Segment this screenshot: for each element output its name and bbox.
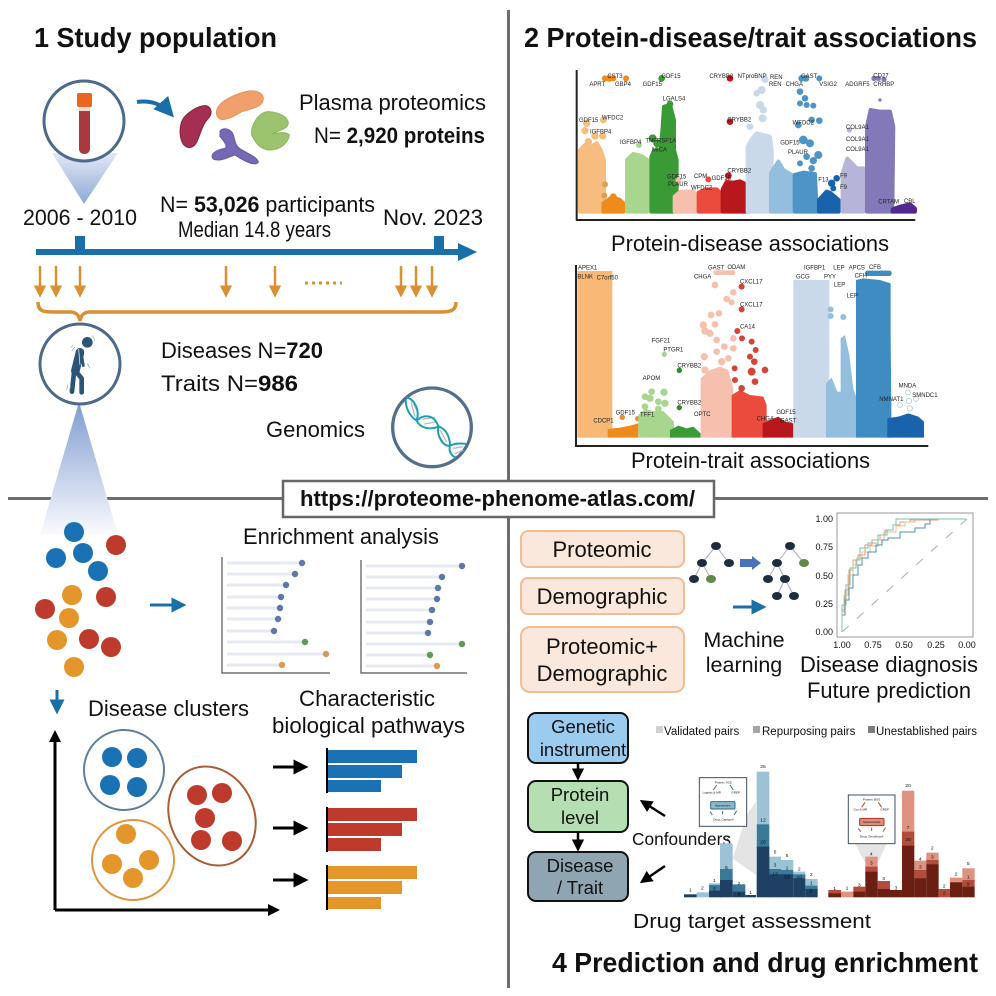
caption: protein-trait: Protein-trait associations [631, 448, 870, 473]
bar values: blue: 5 [713, 886, 716, 892]
bar chart: red pathways [326, 807, 417, 852]
heading: prediction and drug enrichment: 4 Prediction and drug enrichment [552, 947, 978, 978]
inset: ACE triangle: Drug: Captopril [713, 817, 734, 821]
bar values: blue: 2 [701, 886, 704, 892]
gene labels: disease plot: CRHBP [873, 82, 894, 88]
gene labels: disease plot: GDF15 [780, 140, 800, 146]
text: machine learning: learning [706, 653, 782, 677]
legend: pairs: Repurposing pairs [762, 726, 856, 738]
bar chart: orange pathways [326, 865, 417, 910]
cluster axes [55, 737, 272, 910]
chart: protein-disease Manhattan plot [577, 70, 916, 220]
gene labels: trait plot: LEP [833, 266, 845, 272]
bar values: blue: 2 [810, 872, 813, 878]
bar values: blue: 6 [810, 888, 813, 894]
bar values: blue: 2 [798, 867, 801, 873]
panel: study population [23, 22, 486, 535]
chart: ROC curves: 0.25 [815, 599, 833, 609]
box: demographic [521, 578, 684, 614]
gene labels: disease plot: GDF15 [579, 118, 599, 124]
arrow: instrument to protein [577, 763, 579, 777]
arrow: protein to disease [577, 832, 579, 848]
gene labels: disease plot: WFDC2 [793, 121, 815, 127]
gene labels: disease plot: CRYBB2 [709, 74, 734, 80]
box: protein level: level [561, 807, 599, 828]
gene labels: trait plot: CFB [869, 265, 881, 271]
bar values: red: 7 [907, 825, 910, 831]
bar values: blue: 26 [760, 839, 766, 845]
box: disease / trait: / Trait [557, 877, 603, 898]
gene labels: disease plot: NTproBNP [738, 74, 767, 80]
box: genetic instrument: Genetic [551, 716, 615, 737]
bar values: blue: 10 [797, 874, 802, 880]
bar chart: blue pathways [326, 748, 417, 793]
text: machine learning: Machine [703, 628, 785, 652]
gene labels: trait plot: BLNK [577, 275, 593, 281]
bar values: blue: 13 [784, 874, 790, 880]
gene labels: disease plot: APRT [589, 82, 606, 88]
bar values: blue: 1 [810, 880, 813, 886]
arrow: to ML [733, 606, 762, 608]
gene labels: trait plot: APEX1 [578, 266, 598, 272]
icon: patient [40, 324, 120, 404]
gene labels: trait plot: GDF15 [776, 410, 796, 416]
URL banner: https://proteome-phenome-atlas.com/ [300, 486, 695, 511]
bar values: red: 2 [955, 872, 958, 878]
text: outcomes: Future prediction [807, 678, 971, 703]
gene labels: trait plot: TFF1 [640, 412, 655, 418]
box: genetic instrument [528, 713, 628, 763]
gene labels: disease plot: CHGA [786, 82, 803, 88]
icon: cone to clusters [40, 402, 118, 535]
gene labels: disease plot: MICA [652, 148, 667, 154]
box: proteomic+demographic: Proteomic+ [546, 634, 658, 659]
gene labels: trait plot: APCS [849, 266, 865, 272]
gene labels: disease plot: COL9A1 [846, 137, 870, 143]
gene labels: trait plot: NMNAT1 [879, 397, 904, 403]
gene labels: trait plot: OPTC [694, 412, 711, 418]
chart: ROC curves: 0.00 [958, 640, 976, 650]
gene labels: disease plot: F9 [840, 185, 848, 191]
bar values: blue: 4 [738, 892, 741, 898]
chart: lollipop right [361, 560, 467, 673]
bar values: red: 3 [919, 864, 922, 870]
gene labels: trait plot [577, 265, 938, 425]
inset: ACE triangle: Protein: ACE [715, 780, 732, 784]
text: diseases: Diseases N=720 [161, 338, 323, 363]
box: proteomic [521, 531, 684, 567]
box: disease / trait: Disease [547, 855, 613, 876]
text: plasma proteomics: Plasma proteomics [299, 90, 486, 115]
box: demographic: Demographic [537, 584, 667, 609]
gene labels: trait plot: GAST [708, 266, 725, 272]
gene labels: trait plot: ODAM [727, 265, 745, 271]
timeline arrow [36, 236, 477, 261]
text: end date: Nov. 2023 [383, 205, 483, 230]
gene labels: disease plot: F13 [818, 177, 829, 183]
gene labels: trait plot: CXCL17 [740, 302, 763, 308]
bar values: red: 4 [870, 852, 873, 858]
bar values: blue: 12 [724, 836, 729, 842]
gene labels: disease plot: IGFBP4 [620, 140, 642, 146]
inset: ACE triangle [699, 778, 747, 826]
bar values: red: 4 [919, 856, 922, 862]
bar values: blue [689, 764, 813, 898]
orange cluster [92, 820, 174, 900]
bar values: red: 2 [943, 890, 946, 896]
gene labels: trait plot: IGFBP1 [804, 266, 826, 272]
bar values: red: 1 [967, 874, 970, 880]
icon: curved arrow [137, 101, 170, 113]
gene labels: disease plot: WFDC2 [602, 116, 624, 122]
gene labels: trait plot: CHGA [757, 416, 774, 422]
gene labels: disease plot: CST3 [607, 74, 623, 80]
gene labels: trait plot: CDCP1 [593, 419, 614, 425]
icon: proteins [180, 91, 289, 164]
gene labels: trait plot: CRYBB2 [677, 400, 702, 406]
chart: ROC curves: 0.75 [815, 542, 833, 552]
heading: pathways: Characteristic [299, 686, 435, 711]
gene labels: trait plot: APOM [643, 376, 660, 382]
box: protein level [528, 781, 628, 832]
bar values: red: 3 [931, 855, 934, 861]
gene labels: disease plot: CRYBB2 [727, 117, 752, 123]
arrow: confounder to disease [643, 866, 665, 881]
gene labels: trait plot: GAST [780, 419, 797, 425]
box: proteomic+demographic: Demographic [537, 661, 667, 686]
gene labels: disease plot: LGALS4 [663, 97, 686, 103]
chart: ROC curves [815, 513, 976, 650]
heading: disease clusters: Disease clusters [88, 696, 249, 721]
gene labels: disease plot: PLAUR [668, 182, 689, 188]
text: start years: 2006 - 2010 [23, 205, 137, 230]
gene labels: disease plot: GDF15 [661, 74, 681, 80]
gene labels: disease plot: REN [770, 75, 783, 81]
bar values: red: 9 [967, 882, 970, 888]
gene labels: trait plot: LEP [847, 294, 858, 300]
bar values: red: 2 [943, 884, 946, 890]
heading: pathways [272, 686, 465, 738]
box: proteomic+demographic [521, 627, 684, 692]
bar values: blue: 5 [774, 850, 777, 856]
chart: drug target blue bars [684, 764, 818, 898]
chart: ROC curves: 0.00 [815, 627, 833, 637]
orange follow-up arrows [40, 266, 432, 294]
bar values: blue: 12 [760, 817, 766, 823]
bar values: blue: 13 [772, 872, 778, 878]
gene labels: trait plot: CXCL17 [740, 279, 763, 285]
legend: pairs [656, 726, 977, 738]
bar values: blue: 1 [749, 890, 752, 896]
chart: lollipop left [222, 557, 330, 673]
legend: pairs: Validated pairs [664, 726, 739, 738]
bar values: blue: 1 [689, 888, 692, 894]
gene labels: disease plot: COL9A1 [846, 147, 870, 153]
text: outcomes: Disease diagnosis [800, 652, 978, 677]
gene labels: disease plot: CRTAM [878, 200, 899, 206]
chart: ROC curves: 0.75 [864, 640, 882, 650]
heading: pathways: biological pathways [272, 713, 465, 738]
gene labels: disease plot: IGFBP4 [590, 130, 612, 136]
bar values: red: 3 [895, 885, 898, 891]
bar values: red: 3 [882, 876, 885, 882]
gene labels: disease plot: REN [769, 82, 782, 88]
gene labels: trait plot: CFH [855, 273, 867, 279]
bar values: red: 20 [905, 837, 911, 843]
bar values: red: 20 [905, 783, 911, 789]
bar values: blue: 1 [786, 866, 789, 872]
gene labels: trait plot: CRYBB2 [677, 363, 702, 369]
panel: clusters and pathways [35, 522, 467, 916]
chart: ROC curves: 0.50 [895, 640, 913, 650]
bar values: red: 5 [967, 861, 970, 867]
icon: decision trees [689, 542, 809, 600]
gene labels: disease plot: PLAUR [788, 150, 809, 156]
panel: prediction and drug enrichment [521, 513, 978, 978]
gene labels: trait plot: C7orf50 [597, 275, 619, 281]
gene labels: trait plot: CA14 [740, 324, 756, 330]
inset: BSG triangle: GREP [880, 808, 889, 812]
panel: protein-disease/trait associations [524, 22, 977, 473]
box: protein level: Protein [551, 784, 609, 805]
text: machine learning [703, 628, 785, 677]
gene labels: trait plot: GDF15 [616, 411, 636, 417]
bar values: red: 3 [858, 882, 861, 888]
gene labels: disease plot: GBP4 [615, 82, 632, 88]
gene labels: disease plot: F9 [840, 173, 848, 179]
gene labels: disease plot: CRYBB2 [727, 169, 752, 175]
box: proteomic: Proteomic [552, 537, 652, 562]
bar values: blue: 5 [786, 853, 789, 859]
inset: ACE triangle: GREP [731, 790, 740, 794]
gene labels: disease plot: GDF15 [667, 175, 687, 181]
gene labels: disease plot [579, 73, 916, 206]
gene labels: disease plot: GDF15 [712, 176, 732, 182]
bar values: red: 1 [846, 886, 849, 892]
gene labels: trait plot: LEP [834, 282, 845, 288]
bar values: blue: 3 [774, 863, 777, 869]
gene labels: trait plot: CHGA [694, 274, 711, 280]
black arrows to bars [273, 767, 304, 880]
icon: blood tube cone [52, 153, 118, 204]
chart: ROC curves: 1.00 [815, 514, 833, 524]
arrow: confounder to protein [643, 802, 665, 816]
text: participants: N= 53,026 participants [160, 192, 375, 217]
gene labels: disease plot: VSIG2 [819, 82, 838, 88]
text: confounders: Confounders [632, 829, 731, 849]
heading: associations: 2 Protein-disease/trait associations [524, 22, 977, 53]
text: drug target assessment: Drug target assessment [633, 911, 871, 933]
text: outcomes [800, 652, 978, 703]
inset: BSG triangle: Protein: BSG [863, 798, 881, 802]
legend: pairs: Unestablished pairs [876, 726, 977, 738]
URL banner [283, 481, 714, 517]
text: protein count: N= 2,920 proteins [314, 123, 485, 148]
bar values: blue: 2 [738, 881, 741, 887]
inset: BSG triangle: Gastroenteritis [863, 820, 881, 824]
text: median follow-up: Median 14.8 years [178, 217, 331, 242]
box: genetic instrument: instrument [540, 739, 626, 760]
gene labels: disease plot: ADGRF5 [845, 82, 870, 88]
chart: ROC curves: 0.25 [927, 640, 945, 650]
inset: ACE triangle: Logistic & MR [702, 790, 722, 794]
gene labels: trait plot: PYY [824, 274, 836, 280]
chart: ROC curves: 0.50 [815, 571, 833, 581]
gene labels: disease plot: GDF15 [643, 82, 663, 88]
icon: blood tube [44, 81, 124, 161]
bar values: red: 3 [870, 860, 873, 866]
gene labels: trait plot: FGF21 [652, 339, 671, 345]
gene labels: trait plot: SMNDC1 [912, 393, 938, 399]
gene labels: disease plot: COL9A1 [846, 125, 870, 131]
inset: BSG triangle: Cox & MR [854, 808, 868, 812]
inset: BSG triangle: Drug: Gemfibrozil [860, 835, 884, 839]
bar values: blue: 26 [760, 764, 766, 770]
icon: DNA [393, 388, 471, 467]
gene labels: disease plot: CBL [904, 199, 916, 205]
gene labels: disease plot: WFDC2 [691, 185, 713, 191]
orange brace [38, 302, 456, 321]
arrow to clusters [56, 690, 58, 710]
inset: BSG triangle [848, 795, 895, 844]
scattered proteins dots [35, 522, 126, 677]
heading: study population: 1 Study population [34, 22, 277, 53]
bar values: blue: 1 [713, 878, 716, 884]
gene labels: disease plot: GAST [801, 74, 818, 80]
text: genomics: Genomics [266, 417, 365, 442]
arrow to enrichment [150, 604, 182, 606]
gene labels: disease plot: CD27 [873, 73, 889, 79]
caption: protein-disease: Protein-disease associations [611, 231, 889, 256]
inset: ACE triangle: Hypertension [715, 803, 731, 807]
bar values: blue: 6 [725, 865, 728, 871]
blue cluster [84, 730, 164, 810]
gene labels: trait plot: MNDA [899, 383, 916, 389]
text: traits: Traits N= 986 [161, 371, 298, 396]
bar values: red: 2 [931, 845, 934, 851]
chart: drug target red bars [828, 783, 975, 897]
heading: enrichment analysis: Enrichment analysis [243, 524, 439, 549]
chart: protein-trait Manhattan plot [576, 265, 938, 446]
gene labels: trait plot: GCG [796, 274, 810, 280]
gene labels: trait plot: PTGR1 [663, 347, 684, 353]
red cluster [152, 752, 272, 880]
gene labels: disease plot: CPM [694, 174, 707, 180]
chart: ROC curves: 1.00 [833, 640, 851, 650]
box: disease / trait [528, 852, 628, 901]
gene labels: disease plot: TNFRSF1A [645, 139, 676, 145]
axis arrowheads [49, 730, 280, 916]
bar values: red [833, 783, 970, 896]
bar values: red: 1 [833, 886, 836, 892]
